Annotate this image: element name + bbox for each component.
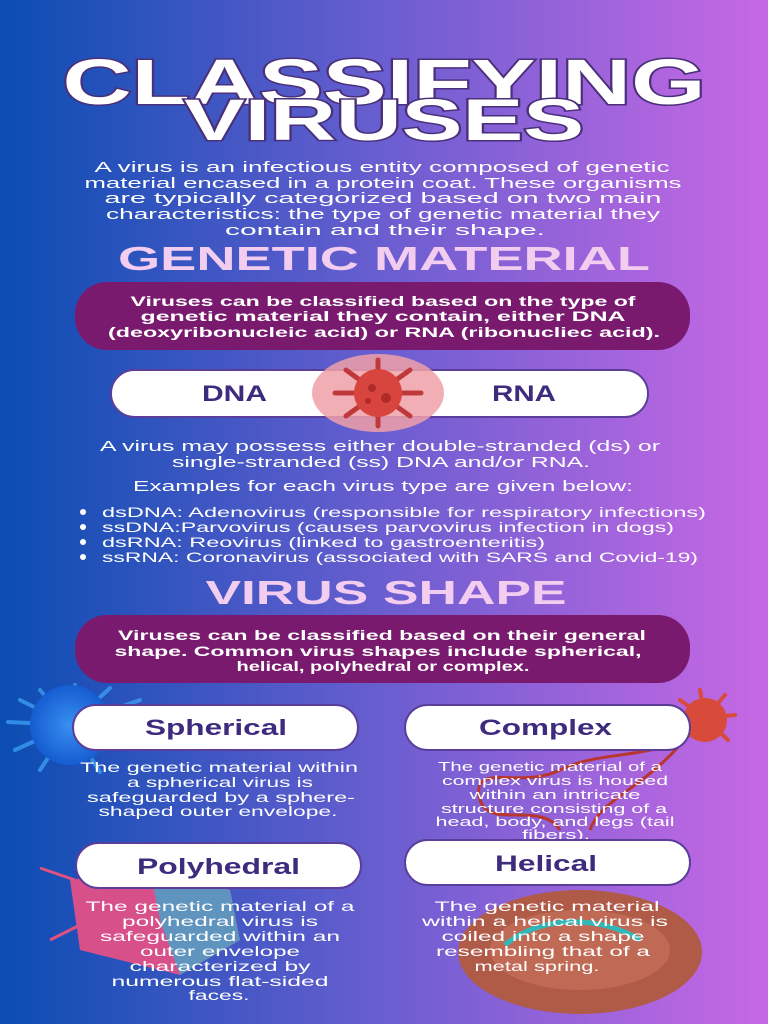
heading: genetic material: GENETIC MATERIAL — [118, 240, 650, 277]
text: ds/ss: A virus may possess either double-stranded (ds) or — [100, 439, 660, 455]
callout: genetic material — [75, 282, 690, 350]
intro paragraph — [84, 160, 682, 239]
bullet list: ssDNA:Parvovirus (causes parvovirus infection in dogs) — [102, 519, 674, 535]
panel: spherical: shaped outer envelope. — [98, 803, 338, 819]
intro paragraph: are typically categorized based on two main — [104, 191, 662, 207]
panel: complex: fibers). — [522, 827, 590, 842]
heading: virus shape: VIRUS SHAPE — [206, 574, 566, 611]
panel: complex: The genetic material of a — [438, 759, 663, 774]
callout: genetic material: (deoxyribonucleic acid) or RNA (ribonucliec acid). — [108, 325, 660, 340]
panel: spherical: safeguarded by a sphere- — [87, 789, 356, 805]
text: ds/ss: Examples for each virus type are given below: — [133, 479, 633, 495]
callout: virus shape: Viruses can be classified based on their general — [118, 628, 646, 643]
panel: helical: resembling that of a — [436, 943, 650, 959]
icon: blue spherical virus — [8, 685, 140, 772]
intro paragraph: contain and their shape. — [225, 223, 545, 239]
icon: red complex virus — [479, 690, 735, 830]
panel: complex — [405, 705, 690, 842]
panel: polyhedral: outer envelope — [140, 943, 300, 959]
panel: complex: Complex — [479, 715, 613, 740]
panel: polyhedral: faces. — [188, 987, 250, 1003]
callout: genetic material: Viruses can be classified based on the type of — [130, 294, 636, 309]
panel: polyhedral: characterized by — [130, 958, 310, 974]
panel: spherical: Spherical — [145, 715, 287, 740]
panel: helical: metal spring. — [474, 958, 600, 974]
panel: helical: The genetic material — [434, 898, 660, 914]
panel: polyhedral: Polyhedral — [137, 854, 300, 879]
icon: polyhedral virus — [40, 868, 240, 975]
text: ds/ss — [100, 439, 660, 495]
bullet list: dsRNA: Reovirus (linked to gastroenteritis) — [102, 534, 545, 550]
panel: complex: complex virus is housed — [442, 773, 668, 788]
callout: genetic material: genetic material they contain, either DNA — [140, 309, 626, 324]
panel: polyhedral: safeguarded within an — [100, 928, 340, 944]
panel: polyhedral: The genetic material of a — [86, 898, 355, 914]
title: CLASSIFYING — [62, 46, 706, 118]
callout: virus shape: helical, polyhedral or complex. — [236, 659, 530, 674]
panel: helical: Helical — [495, 851, 597, 876]
panel: helical: within a helical virus is — [420, 913, 668, 929]
panel: polyhedral — [76, 843, 361, 1003]
DNA / RNA pill: DNA — [202, 381, 267, 406]
bullet list: dsDNA: Adenovirus (responsible for respiratory infections) — [102, 504, 706, 520]
title — [62, 46, 706, 153]
panel: spherical — [73, 705, 358, 819]
panel: complex: within an intricate — [468, 787, 640, 802]
panel: polyhedral: polyhedral virus is — [122, 913, 318, 929]
bullet list — [80, 504, 706, 565]
callout: virus shape: shape. Common virus shapes include spherical, — [114, 644, 642, 659]
intro paragraph: characteristics: the type of genetic material they — [106, 207, 661, 223]
DNA / RNA pill: RNA — [492, 381, 556, 406]
intro paragraph: material encased in a protein coat. These organisms — [84, 176, 682, 192]
panel: helical — [405, 840, 690, 974]
DNA / RNA pill — [111, 370, 648, 417]
panel: complex: structure consisting of a — [441, 801, 668, 816]
bullet list: ssRNA: Coronavirus (associated with SARS and Covid-19) — [102, 549, 698, 565]
panel: complex: head, body, and legs (tail — [436, 814, 675, 829]
intro paragraph: A virus is an infectious entity composed of genetic — [94, 160, 670, 176]
icon: red virus — [312, 354, 444, 432]
text: ds/ss: single-stranded (ss) DNA and/or RNA. — [172, 455, 590, 471]
title: VIRUSES — [184, 88, 584, 153]
panel: spherical: a spherical virus is — [127, 774, 313, 790]
callout: virus shape — [75, 615, 690, 683]
panel: helical: coiled into a shape — [442, 928, 645, 944]
panel: spherical: The genetic material within — [80, 759, 358, 775]
panel: polyhedral: numerous flat-sided — [112, 973, 328, 989]
icon: helical virus — [458, 890, 702, 1014]
